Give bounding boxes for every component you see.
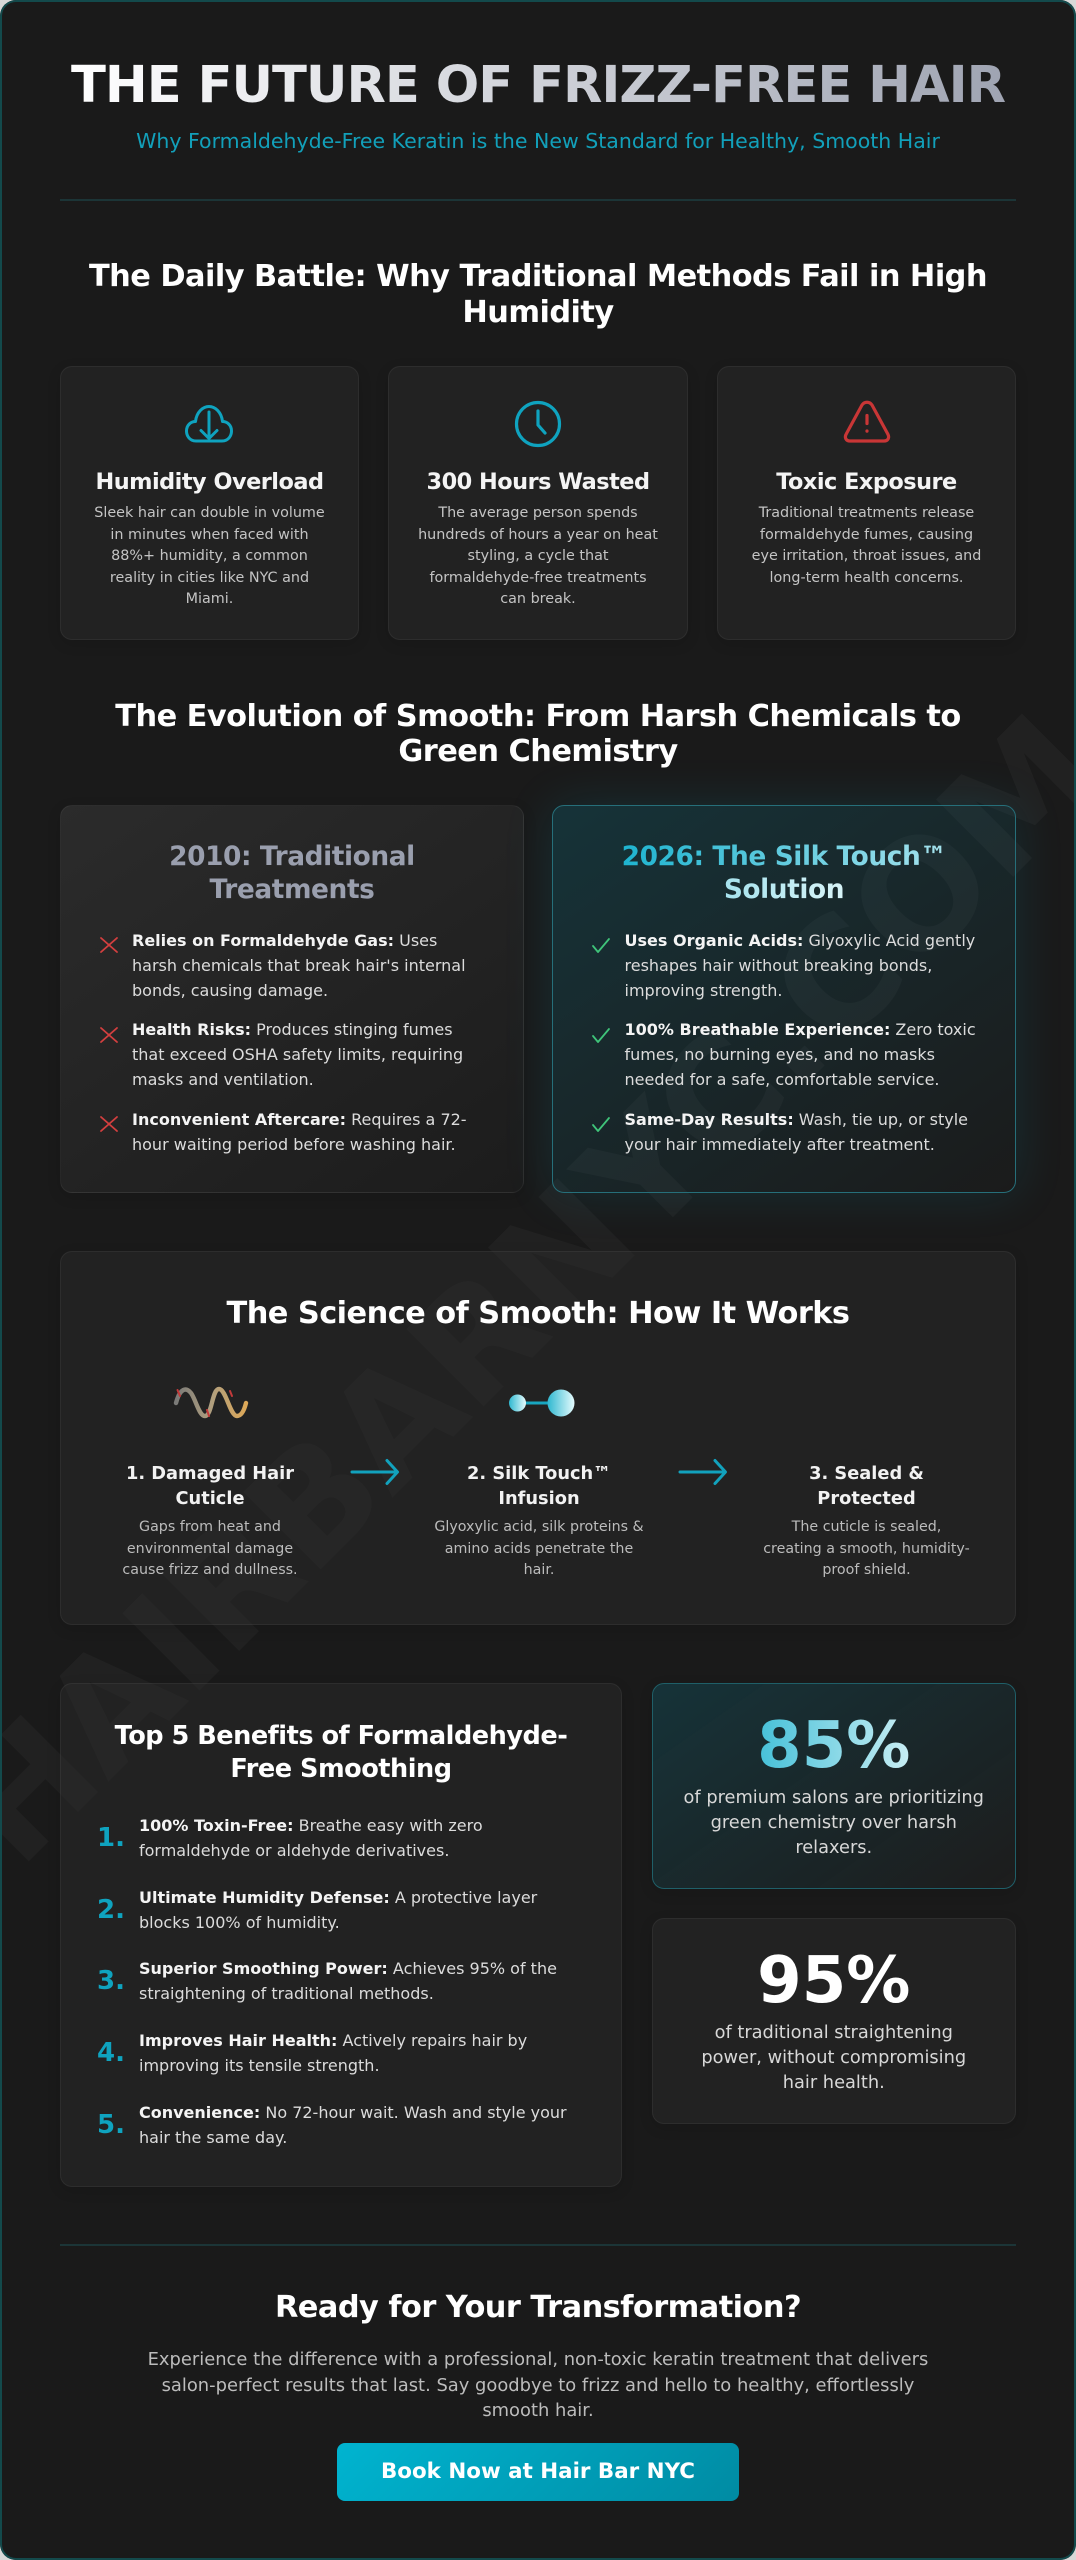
heading: call to action: Ready for Your Transformation? <box>275 2290 801 2324</box>
card text: The average person spends <box>438 505 638 521</box>
step text: Gaps from heat and <box>139 1519 281 1535</box>
benefit 2 <box>97 1888 538 1932</box>
benefit 3 <box>97 1956 607 2008</box>
heading: the daily battle: The Daily Battle: Why Traditional Methods Fail in High <box>89 259 987 294</box>
button <box>337 2443 739 2501</box>
heading: evolution of smooth: The Evolution of Smooth: From Harsh Chemicals to <box>115 698 961 734</box>
icon: check <box>592 938 610 953</box>
benefit text: Convenience: No 72-hour wait. Wash and style your <box>139 2102 567 2122</box>
benefit 5 <box>97 2100 607 2152</box>
benefit text: formaldehyde or aldehyde derivatives. <box>139 1841 449 1860</box>
cta text: salon-perfect results that last. Say goodbye to frizz and hello to healthy, effortlessly <box>162 2375 914 2396</box>
panel heading <box>169 841 415 904</box>
number: 1. <box>97 1823 125 1853</box>
card text: long-term health concerns. <box>770 570 963 586</box>
cta text: Experience the difference with a professional, non-toxic keratin treatment that delivers <box>148 2349 928 2370</box>
heading: evolution of smooth <box>115 698 961 769</box>
list item: formaldehyde gas <box>132 931 466 1000</box>
step text: proof shield. <box>822 1562 911 1578</box>
stat text: of traditional straightening power, without compromising hair health. <box>701 2022 966 2093</box>
benefit text: Improves Hair Health: Actively repairs hair by <box>139 2031 527 2050</box>
step title: 3. Sealed & <box>809 1463 924 1484</box>
heading: Top 5 Benefits of Formaldehyde- <box>115 1721 567 1751</box>
icon: damaged hair strand <box>174 1386 248 1418</box>
step 2 <box>434 1463 644 1578</box>
benefit text: Ultimate Humidity Defense: A protective layer <box>139 1888 537 1906</box>
icon: cloud <box>185 405 233 442</box>
step text <box>434 1519 644 1578</box>
benefit 1 <box>97 1816 483 1860</box>
card text: Traditional treatments release <box>759 505 974 521</box>
list item: formaldehyde gas: harsh chemicals that break hair's internal <box>132 956 466 975</box>
list item: health risks: that exceed OSHA safety limits, requiring <box>132 1045 463 1064</box>
list item: health risks: masks and ventilation. <box>132 1070 314 1089</box>
benefit text: Superior Smoothing Power: Achieves 95% of the <box>139 1959 557 1978</box>
benefit text: straightening of traditional methods. <box>139 1984 434 2003</box>
card text: can break. <box>500 591 576 607</box>
benefit text: 100% Toxin-Free: Breathe easy with zero <box>139 1816 483 1835</box>
arrow <box>350 1458 399 1486</box>
number: 3. <box>97 1966 125 1996</box>
card text <box>752 505 981 586</box>
card text <box>418 505 658 607</box>
button: Book Now at Hair Bar NYC <box>381 2459 695 2484</box>
card text: Miami. <box>186 591 233 607</box>
step text: creating a smooth, humidity- <box>763 1541 970 1557</box>
step text: Glyoxylic acid, silk proteins & <box>434 1519 644 1535</box>
list item: same day: your hair immediately after treatment. <box>624 1135 935 1154</box>
icon: warning triangle <box>844 400 890 443</box>
benefit 4 <box>97 2028 607 2080</box>
heading: The Science of Smooth: How It Works <box>227 1296 849 1331</box>
list item: breathable <box>624 1020 976 1089</box>
panel heading: Treatments <box>210 874 374 904</box>
panel: top 5 benefits <box>60 1683 622 2187</box>
subtitle: Why Formaldehyde-Free Keratin is the New Standard for Healthy, Smooth Hair <box>136 129 940 153</box>
panel: science of smooth <box>60 1251 1016 1625</box>
card text: styling, a cycle that <box>468 548 608 564</box>
step title: Cuticle <box>176 1488 244 1509</box>
step title: 1. Damaged Hair <box>126 1463 294 1484</box>
step title: 2. Silk Touch™ <box>467 1463 611 1484</box>
icon: clock <box>514 400 562 448</box>
list item: organic acids <box>624 931 975 1000</box>
card text: formaldehyde-free treatments <box>429 570 647 586</box>
card text <box>94 505 325 607</box>
card title: Humidity Overload <box>95 469 324 495</box>
icon: silk molecule <box>509 1390 574 1416</box>
step title <box>467 1463 611 1509</box>
step title: Infusion <box>498 1488 580 1509</box>
list item: aftercare <box>132 1110 467 1154</box>
card text: reality in cities like NYC and <box>110 570 309 586</box>
cta text <box>130 2347 946 2424</box>
icon: check <box>592 1117 610 1132</box>
icon: cross <box>100 1027 118 1043</box>
benefit text: hair the same day. <box>139 2128 287 2147</box>
number: 5. <box>97 2110 125 2140</box>
list item: organic acids: reshapes hair without breaking bonds, <box>624 956 932 975</box>
card text: eye irritation, throat issues, and <box>752 548 981 564</box>
panel: 2010 traditional treatments <box>60 805 524 1193</box>
card title: 300 Hours Wasted <box>426 469 650 495</box>
list item: organic acids: Uses Organic Acids: Glyoxylic Acid gently <box>624 931 975 950</box>
benefit text <box>139 1884 599 1935</box>
step title: Protected <box>817 1488 916 1509</box>
step text <box>122 1519 298 1578</box>
list item: same day <box>624 1110 968 1154</box>
benefit text: improving its tensile strength. <box>139 2056 380 2075</box>
heading: Free Smoothing <box>230 1754 452 1784</box>
list item: same day: Same-Day Results: Wash, tie up, or style <box>624 1110 968 1129</box>
list item: formaldehyde gas: Relies on Formaldehyde Gas: Uses <box>132 931 437 950</box>
list item: breathable: needed for a safe, comfortable service. <box>624 1070 940 1089</box>
benefit text <box>139 2028 599 2078</box>
heading: evolution of smooth: Green Chemistry <box>398 734 678 769</box>
step title <box>126 1463 294 1509</box>
list item: formaldehyde gas: bonds, causing damage. <box>132 981 328 1000</box>
benefit text <box>139 2100 599 2150</box>
stat: 95 percent <box>652 1918 1016 2124</box>
card text: Sleek hair can double in volume <box>94 505 325 521</box>
panel: toxic exposure <box>717 366 1016 640</box>
panel heading: 2010: Traditional <box>169 841 415 872</box>
number: 2. <box>97 1894 125 1924</box>
stat: 85 percent <box>652 1683 1016 1889</box>
heading <box>114 1721 567 1784</box>
list item: breathable: 100% Breathable Experience: Zero toxic <box>624 1020 976 1039</box>
card title: Toxic Exposure <box>776 469 957 495</box>
panel: humidity overload <box>60 366 359 640</box>
list item: health risks <box>132 1020 463 1089</box>
step text: environmental damage <box>127 1541 293 1557</box>
card text: hundreds of hours a year on heat <box>418 526 658 542</box>
cta text: smooth hair. <box>482 2400 594 2421</box>
heading: the daily battle: Humidity <box>462 294 614 330</box>
number: 4. <box>97 2038 125 2068</box>
step 1 <box>122 1463 298 1578</box>
step text: amino acids penetrate the <box>445 1541 633 1557</box>
icon: check <box>592 1028 610 1043</box>
arrow <box>678 1458 727 1486</box>
list item: health risks: Health Risks: Produces stinging fumes <box>132 1020 453 1039</box>
step text: The cuticle is sealed, <box>792 1519 941 1535</box>
stat number: 95% <box>757 1944 910 2018</box>
stat text: of premium salons are prioritizing green chemistry over harsh relaxers. <box>684 1787 984 1858</box>
list item: organic acids: improving strength. <box>624 981 782 1000</box>
card text: formaldehyde fumes, causing <box>760 526 973 542</box>
card text: in minutes when faced with <box>110 526 309 542</box>
step text: hair. <box>524 1562 554 1578</box>
step title <box>809 1463 924 1509</box>
heading: the daily battle <box>89 259 987 330</box>
list item: aftercare: Inconvenient Aftercare: Requires a 72- <box>132 1110 467 1129</box>
card text: 88%+ humidity, a common <box>111 548 308 564</box>
panel: 300 hours wasted <box>388 366 688 640</box>
benefit text: blocks 100% of humidity. <box>139 1913 340 1932</box>
icon: cross <box>100 1116 118 1132</box>
benefit text <box>139 1816 483 1860</box>
step 3 <box>763 1463 970 1578</box>
panel heading: Solution <box>724 874 844 904</box>
list item: aftercare: hour waiting period before washing hair. <box>132 1135 456 1154</box>
stat number: 85% <box>757 1709 910 1783</box>
icon: cross <box>100 937 118 953</box>
panel heading: 2026: The Silk Touch™ <box>622 841 946 872</box>
list item: breathable: fumes, no burning eyes, and no masks <box>624 1045 935 1064</box>
step text <box>763 1519 970 1578</box>
panel: 2026 silk touch solution <box>552 805 1016 1193</box>
benefit text <box>139 1956 599 2006</box>
step text: cause frizz and dullness. <box>122 1562 298 1578</box>
title: THE FUTURE OF FRIZZ-FREE HAIR <box>71 55 1005 115</box>
panel heading <box>622 841 946 904</box>
